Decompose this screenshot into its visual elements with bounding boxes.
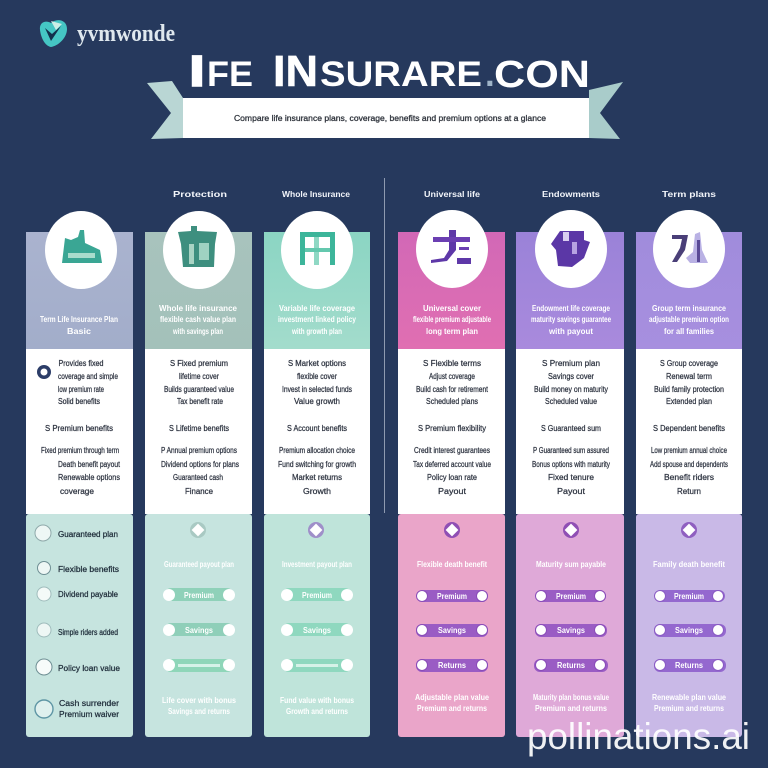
lower features: Adjustable plan value [415, 693, 489, 702]
column labels: Endowments [542, 189, 600, 199]
lower features: Savings and returns [168, 707, 230, 716]
lower rows with icons [35, 525, 121, 719]
body text: coverage [60, 487, 95, 496]
icon circle [535, 210, 607, 288]
lower features: Premium [184, 591, 214, 600]
subtitle: Compare life insurance plans, coverage, benefits and premium options at a glance [234, 113, 546, 123]
header text: Term Life Insurance Plan [40, 315, 118, 324]
icon: building [300, 232, 335, 265]
body text: Premium allocation choice [279, 446, 355, 455]
panel: column 2: flexible cash value plan [160, 315, 236, 324]
white body [636, 349, 742, 514]
body text: Renewal term [666, 372, 712, 381]
body text: Extended plan [666, 397, 712, 406]
body text: Renewable options [58, 473, 120, 482]
panel: column 5: maturity savings guarantee [531, 315, 611, 324]
white body [145, 349, 252, 514]
body text: Fixed premium through term [41, 446, 119, 455]
lower features: Life cover with bonus [162, 696, 236, 705]
body text: P Annual premium options [161, 446, 237, 455]
column labels: Universal life [424, 189, 480, 199]
icon: building [431, 230, 471, 264]
body text: Invest in selected funds [282, 385, 352, 394]
body text: flexible cover [297, 372, 337, 381]
lower panel [264, 514, 370, 737]
lower features: Returns [675, 661, 704, 670]
body text: Fund switching for growth [278, 460, 356, 469]
icon: building [178, 226, 217, 267]
icon: building [62, 230, 102, 263]
body text: Add spouse and dependents [650, 460, 728, 469]
lower features [652, 522, 726, 713]
icon circle [281, 211, 353, 289]
header band [636, 232, 742, 349]
lower features: Savings [557, 626, 585, 635]
panel: column 6: adjustable premium option [649, 315, 729, 324]
title ribbon [147, 81, 623, 139]
lower features: Maturity sum payable [536, 560, 606, 569]
header text: Endowment life coverage [532, 304, 610, 313]
body text: Provides fixed [58, 359, 104, 368]
column labels: Protection [173, 189, 227, 199]
lower features: Renewable plan value [652, 693, 726, 702]
lower panel [516, 514, 624, 737]
body text [41, 359, 121, 496]
body text: Return [677, 487, 701, 496]
icon: building [551, 231, 590, 267]
lower features: Premium [556, 592, 586, 601]
body text: Policy loan rate [427, 473, 477, 482]
lower features: Savings [675, 626, 703, 635]
lower features: Premium and returns [417, 704, 487, 713]
panel: column 5: with payout [548, 327, 593, 336]
lower features: Investment payout plan [282, 560, 352, 569]
body text: Benefit riders [664, 473, 714, 482]
title: FE [207, 55, 253, 94]
panel: column 2: with savings plan [172, 327, 223, 336]
header band [264, 232, 370, 349]
body text: Build family protection [654, 385, 724, 394]
body text: Scheduled plans [426, 397, 478, 406]
body text [278, 359, 356, 496]
body text [650, 359, 728, 496]
lower panel [145, 514, 252, 737]
header band [516, 232, 624, 349]
icon circle [416, 210, 488, 288]
ribbon band [183, 98, 589, 138]
lower features: Premium [674, 592, 704, 601]
lower features [280, 522, 354, 716]
lower features: Fund value with bonus [280, 696, 354, 705]
lower rows with icons: Cash surrender [59, 699, 119, 708]
white body [516, 349, 624, 514]
body text: Tax benefit rate [177, 397, 223, 406]
body text: Death benefit payout [58, 460, 121, 469]
body text: S Flexible terms [423, 359, 481, 368]
body text: Build money on maturity [534, 385, 608, 394]
panel: column 5 [516, 210, 624, 737]
body text: Growth [303, 487, 331, 496]
lower features [162, 522, 236, 716]
body text: S Account benefits [287, 424, 347, 433]
panel: column 3: investment linked policy [278, 315, 356, 324]
lower rows with icons: Policy loan value [58, 664, 121, 673]
lower rows with icons: Premium waiver [59, 710, 119, 719]
body text: S Fixed premium [170, 359, 228, 368]
icon circle [653, 210, 725, 288]
body text: Bonus options with maturity [532, 460, 610, 469]
title: I [189, 47, 205, 96]
lower features: Premium and returns [535, 704, 607, 713]
lower rows with icons: Simple riders added [58, 628, 118, 637]
panel: column 1: Basic [67, 327, 92, 336]
panel: column 6: for all families [664, 327, 715, 336]
header text: Whole life insurance [159, 304, 238, 313]
lower features: Premium [302, 591, 332, 600]
title: CON [494, 54, 590, 96]
body text: S Dependent benefits [653, 424, 725, 433]
icon circle [163, 211, 235, 289]
logo [40, 20, 175, 47]
lower features: Returns [557, 661, 586, 670]
lower features: Maturity plan bonus value [533, 693, 609, 702]
body text: Payout [438, 487, 467, 496]
lower rows with icons: Flexible benefits [58, 565, 119, 574]
body text: S Premium benefits [45, 424, 113, 433]
body text: S Group coverage [660, 359, 718, 368]
body text: Savings cover [548, 372, 594, 381]
panel: column 3 [264, 211, 370, 737]
bullet icon [37, 365, 51, 379]
panel: column 2 [145, 211, 252, 737]
lower features: Guaranteed payout plan [164, 560, 234, 569]
body text: Payout [557, 487, 586, 496]
body text: Fixed tenure [548, 473, 595, 482]
lower features: Flexible death benefit [417, 560, 487, 569]
watermark: pollinations.ai [527, 716, 750, 757]
lower features: Growth and returns [286, 707, 348, 716]
body text: S Lifetime benefits [169, 424, 229, 433]
body text: Guaranteed cash [173, 473, 223, 482]
lower features [533, 522, 609, 713]
lower features: Savings [438, 626, 466, 635]
lower features: Premium [437, 592, 467, 601]
column labels: Whole Insurance [282, 189, 350, 199]
panel: column 6 [636, 210, 742, 737]
body text: Market returns [292, 473, 342, 482]
column labels [173, 189, 716, 199]
title [189, 47, 590, 96]
header text: Group term insurance [652, 304, 726, 313]
lower panel [398, 514, 505, 737]
body text: low premium rate [58, 385, 104, 394]
lower features: Savings [185, 626, 213, 635]
body text [532, 359, 610, 496]
white body [264, 349, 370, 514]
lower features [415, 522, 489, 713]
panel: column 3: with growth plan [291, 327, 342, 336]
header text: Universal cover [423, 304, 481, 313]
body text: S Guaranteed sum [541, 424, 601, 433]
icon: building [672, 232, 708, 263]
panel: column 4: long term plan [426, 327, 478, 336]
body text: Value growth [294, 397, 340, 406]
panel: column 4 [398, 210, 505, 737]
title: SURARE [320, 55, 482, 94]
body text: Solid benefits [58, 397, 100, 406]
header band [398, 232, 505, 349]
panel: column 1 [26, 211, 133, 737]
body text: coverage and simple [58, 372, 118, 381]
brand name: yvmwonde [77, 21, 175, 47]
panel: column 4: flexible premium adjustable [413, 315, 491, 324]
header text: Variable life coverage [279, 304, 356, 313]
body text: S Premium flexibility [418, 424, 486, 433]
title: IN [273, 47, 318, 96]
body text: Tax deferred account value [413, 460, 491, 469]
lower features: Premium and returns [654, 704, 724, 713]
body text: S Market options [288, 359, 346, 368]
body text [161, 359, 239, 496]
body text: S Premium plan [542, 359, 600, 368]
body text: Dividend options for plans [161, 460, 239, 469]
lower features: Returns [438, 661, 467, 670]
icon circle [45, 211, 117, 289]
body text [413, 359, 491, 496]
title: . [485, 55, 495, 94]
ribbon left tail [147, 81, 183, 139]
lower panel [636, 514, 742, 737]
lower panel [26, 514, 133, 737]
lower features: Savings [303, 626, 331, 635]
lower features: Family death benefit [653, 560, 725, 569]
body text: Scheduled value [545, 397, 597, 406]
body text: P Guaranteed sum assured [533, 446, 609, 455]
white body [398, 349, 505, 514]
body text: Finance [185, 487, 214, 496]
body text: Credit interest guarantees [414, 446, 490, 455]
icon: logo heart [40, 20, 67, 47]
body text: Build cash for retirement [416, 385, 489, 394]
header band [145, 232, 252, 349]
ribbon right tail [589, 82, 623, 139]
body text: Low premium annual choice [651, 446, 727, 455]
body text: Builds guaranteed value [164, 385, 234, 394]
white body [26, 349, 133, 514]
column labels: Term plans [662, 189, 716, 199]
body text: lifetime cover [179, 372, 219, 381]
header band [26, 232, 133, 349]
lower rows with icons: Dividend payable [58, 590, 119, 599]
body text: Adjust coverage [429, 372, 475, 381]
lower rows with icons: Guaranteed plan [58, 530, 118, 539]
center divider [384, 178, 385, 513]
